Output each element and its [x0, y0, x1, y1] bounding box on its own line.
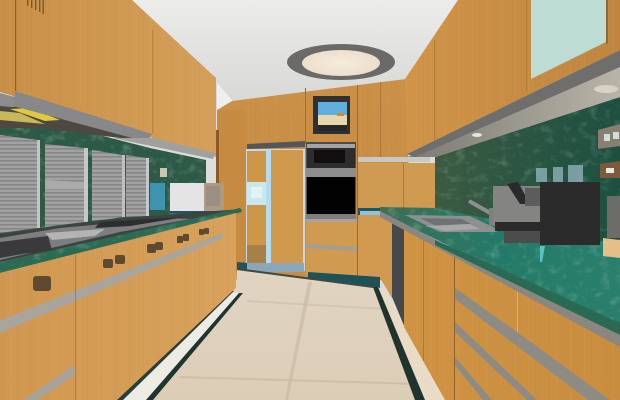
teal plinth [237, 262, 380, 288]
glasses [536, 165, 583, 182]
right green splashback [435, 97, 620, 250]
right counter edge rail [380, 211, 620, 347]
left floor inlay [115, 291, 243, 400]
right floor inlay [373, 287, 447, 400]
right lower cabinets [380, 212, 620, 400]
left upper cabinets [0, 0, 216, 157]
under oven drawers [306, 219, 357, 275]
wooden board [603, 196, 620, 258]
coffee machine [493, 182, 600, 245]
built-in oven and microwave [306, 142, 356, 221]
left worktop with cooktop [0, 208, 242, 273]
left green splashback [0, 116, 206, 250]
left hood and lights [0, 91, 215, 159]
skylight [287, 44, 395, 80]
wall mounted tv [313, 96, 350, 134]
cabinet knobs [33, 228, 209, 291]
floor [115, 270, 447, 400]
left lower cabinets [0, 213, 236, 400]
right worktop [380, 207, 620, 330]
ceiling [130, 0, 458, 110]
panelled refrigerator [246, 141, 305, 272]
wall sockets [598, 124, 620, 178]
drawer pulls [455, 288, 610, 400]
blue panel, white box and microwave [150, 183, 224, 213]
sink and tap [405, 201, 497, 232]
right upper cabinets [405, 0, 620, 154]
side cabinet and rail [358, 157, 435, 277]
right underside and lights [407, 50, 620, 157]
back wall cabinetry [216, 79, 412, 280]
window blinds [0, 135, 149, 233]
